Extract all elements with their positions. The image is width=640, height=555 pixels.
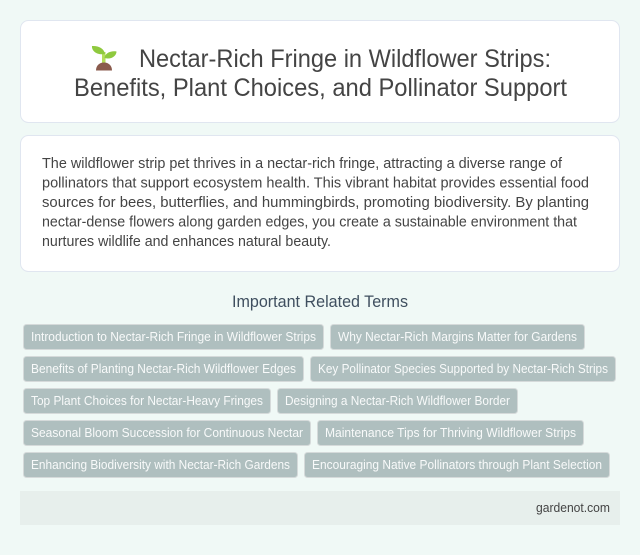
icon: sprout [92,46,116,70]
title text: Benefits, Plant Choices, and Pollinator Support [74,74,567,102]
description text: The wildflower strip pet thrives in a nectar-rich fringe, attracting a diverse range of [42,156,563,172]
tag 5 [24,388,270,414]
description text: nurtures wildlife and enhances natural beauty. [42,234,331,250]
title text: Nectar-Rich Fringe in Wildflower Strips: [139,45,551,73]
tag 7 [24,420,310,446]
tag 6: Designing a Nectar-Rich Wildflower Border [285,394,510,408]
related terms tags [24,324,616,478]
tag 9: Enhancing Biodiversity with Nectar-Rich Gardens [31,458,290,472]
tag 4 [310,356,616,382]
footer [20,491,620,525]
tag 8: Maintenance Tips for Thriving Wildflower Strips [325,426,576,440]
panel: description [20,136,620,272]
tag 1 [24,324,324,350]
tag 2 [330,324,584,350]
tag 2: Why Nectar-Rich Margins Matter for Gardens [338,330,577,344]
footer source text: gardenot.com [536,501,610,515]
tag 1: Introduction to Nectar-Rich Fringe in Wildflower Strips [31,330,316,344]
tag 5: Top Plant Choices for Nectar-Heavy Fringes [31,394,263,408]
tag 7: Seasonal Bloom Succession for Continuous Nectar [31,426,303,440]
tag 6 [278,388,518,414]
description text: nectar-dense flowers along garden edges, you create a sustainable environment that [42,214,577,230]
description text: pollinators that support ecosystem health. This vibrant habitat provides essential food [42,176,589,192]
tag 9 [24,452,298,478]
description text [42,156,589,250]
tag 4: Key Pollinator Species Supported by Nectar-Rich Strips [318,362,608,376]
tag 3: Benefits of Planting Nectar-Rich Wildflower Edges [31,362,296,376]
heading: important related terms: Important Related Terms [232,293,408,311]
description text: sources for bees, butterflies, and hummingbirds, promoting biodiversity. By planting [42,195,589,211]
title text [74,45,567,102]
tag 8 [318,420,584,446]
panel: title card [20,20,620,122]
tag 10: Encouraging Native Pollinators through Plant Selection [312,458,602,472]
tag 3 [24,356,304,382]
tag 10 [304,452,610,478]
